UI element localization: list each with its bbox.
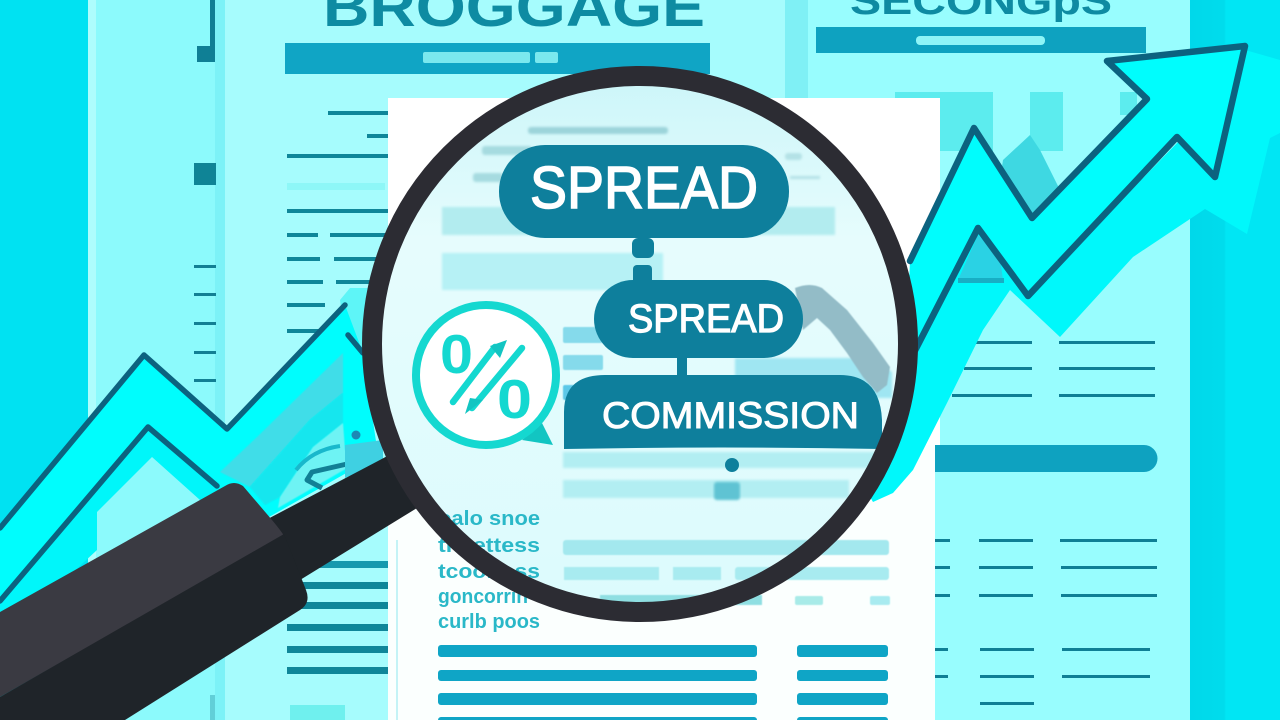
icon: percent badge: 0 <box>497 368 532 430</box>
panel: white document <box>388 98 940 720</box>
pill: spread secondary: SPREAD <box>628 297 784 341</box>
title bar <box>285 43 710 74</box>
document text block: oalo snoe <box>438 508 540 530</box>
lens ring <box>372 76 908 612</box>
arrow 3D detail <box>220 353 383 508</box>
pill: spread <box>499 145 789 238</box>
magnifier lens <box>372 76 908 633</box>
panel: brokerage sheet <box>225 0 785 720</box>
pill: spread: SPREAD <box>530 155 758 221</box>
section bar <box>930 445 1158 472</box>
panel: seconds sheet <box>785 0 1190 720</box>
document text block: tncettess <box>438 535 540 557</box>
arrow body <box>0 305 378 601</box>
faded document rows <box>442 127 876 498</box>
panel: back sheet left <box>88 0 225 720</box>
document text block <box>438 508 540 633</box>
sheet text lines <box>287 111 388 720</box>
icon: percent badge: 0 <box>440 323 473 385</box>
arrow outline left <box>0 305 363 601</box>
pill: commission: COMMISSION <box>602 395 859 436</box>
arrow outline right <box>905 46 1245 370</box>
blue glow <box>735 358 892 398</box>
handle grip <box>0 483 308 720</box>
grey swoosh <box>795 285 890 393</box>
document text block: tcoorlass <box>438 561 540 583</box>
title bar <box>816 27 1146 53</box>
pill: spread secondary <box>594 280 803 358</box>
lower faded rows <box>563 540 890 605</box>
shade under right arrow <box>958 235 1003 280</box>
document text block: curlb poos <box>438 611 540 633</box>
lens glass <box>378 82 902 606</box>
pill connectors <box>632 238 740 500</box>
handle shaft <box>262 452 430 580</box>
document text block: goncorrin <box>438 586 528 608</box>
sheet text lines <box>935 341 1157 705</box>
trend arrow <box>0 46 1245 601</box>
side blocks <box>563 327 603 400</box>
pill: commission <box>564 375 882 449</box>
magnifier handle <box>0 452 430 720</box>
document rows <box>438 645 888 720</box>
lens contents <box>442 127 892 498</box>
bar chart blocks <box>895 92 1137 215</box>
icon: percent badge <box>416 305 556 445</box>
